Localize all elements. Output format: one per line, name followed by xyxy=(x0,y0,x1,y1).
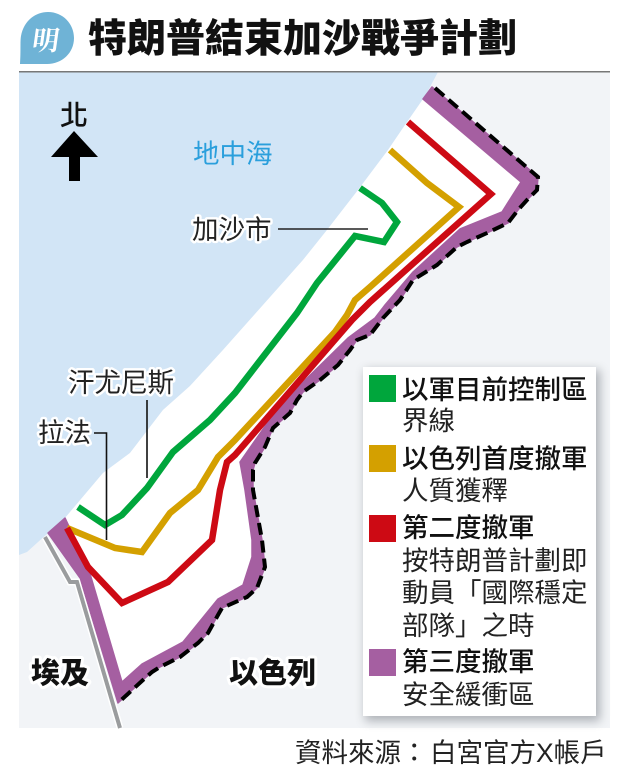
Egypt border: grey line xyxy=(45,537,120,728)
label: Rafah with leader xyxy=(38,418,106,540)
legend item: yellow xyxy=(369,444,588,506)
legend item: red: 第二度撤軍 xyxy=(402,513,534,543)
legend item: yellow: 人質獲釋 xyxy=(402,476,508,506)
sea: Mediterranean xyxy=(19,72,438,555)
label: Israel: 以色列 xyxy=(229,656,316,690)
source credit: 白宮官方X帳戶 xyxy=(430,738,607,768)
logo: Ming Pao speech bubble xyxy=(20,12,74,64)
legend item: purple: 安全緩衝區 xyxy=(402,680,534,710)
label: Gaza City with leader: 加沙市 xyxy=(192,215,272,245)
compass: north xyxy=(51,100,98,181)
legend item: red: 動員「國際穩定 xyxy=(402,578,588,608)
yellow line: first withdrawal xyxy=(67,150,459,552)
legend item: red: 部隊」之時 xyxy=(402,611,534,641)
label: Khan Younis with leader: 汗尤尼斯 xyxy=(68,368,174,398)
legend item: purple: 第三度撤軍 xyxy=(402,647,534,677)
compass: north: 北 xyxy=(60,100,88,131)
legend item: green xyxy=(369,375,588,436)
Gaza strip: white area xyxy=(65,99,521,682)
label: Rafah with leader: 拉法 xyxy=(38,418,91,448)
logo: Ming Pao speech bubble: 明 xyxy=(30,19,62,58)
label: Mediterranean: 地中海 xyxy=(193,139,272,169)
legend item: red xyxy=(369,513,588,641)
label: Egypt: 埃及 xyxy=(31,657,89,690)
legend item: red: 按特朗普計劃即 xyxy=(402,546,588,576)
legend item: green: 以軍目前控制區 xyxy=(402,375,588,405)
red line: second withdrawal xyxy=(67,122,491,603)
title: 特朗普結束加沙戰爭計劃 xyxy=(88,18,517,61)
label: Khan Younis with leader xyxy=(68,368,174,478)
legend panel xyxy=(363,367,600,721)
legend item: yellow: 以色列首度撤軍 xyxy=(402,444,588,474)
map background: land xyxy=(19,72,610,728)
legend item: purple xyxy=(369,647,534,710)
Israel border: dashed line xyxy=(118,88,538,703)
source credit: 資料來源： xyxy=(295,738,428,768)
third withdrawal band: purple buffer zone xyxy=(48,87,538,703)
legend item: green: 界線 xyxy=(402,406,455,436)
green line: current IDF control xyxy=(78,188,397,525)
title rule xyxy=(19,71,610,72)
